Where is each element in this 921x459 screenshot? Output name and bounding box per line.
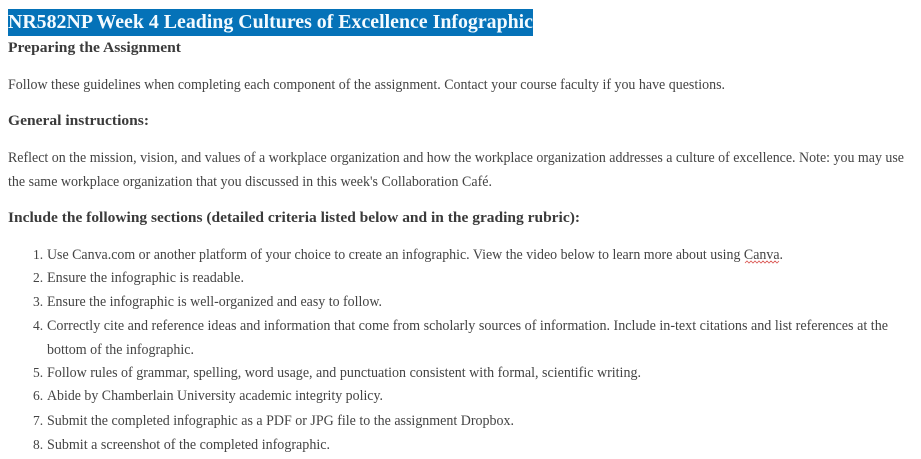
list item 8: Submit a screenshot of the completed infographic. — [47, 437, 330, 453]
list item 7: 7. — [33, 413, 43, 428]
title: NR582NP Week 4 Leading Cultures of Excellence Infographic — [8, 12, 533, 33]
list item 6: 6. — [33, 388, 43, 403]
text block: reflect: the same workplace organization that you discussed in this week's Collaboration Café. — [8, 174, 492, 190]
list item 5: Follow rules of grammar, spelling, word usage, and punctuation consistent with formal, scientific writing. — [47, 365, 641, 381]
list item 4: 4. — [33, 318, 43, 333]
list item 6: Abide by Chamberlain University academic integrity policy. — [47, 388, 383, 404]
heading: preparing the assignment: Preparing the Assignment — [8, 40, 181, 56]
list item 4: bottom of the infographic. — [47, 342, 194, 358]
heading: general instructions: General instructions: — [8, 113, 149, 129]
list item 4 — [33, 318, 888, 358]
list item 1: 1. — [33, 247, 43, 262]
text block: reflect — [8, 150, 904, 190]
list item 2: 2. — [33, 270, 43, 285]
list item 4: Correctly cite and reference ideas and information that come from scholarly sources of information. Include in-text citations and list references at the — [47, 318, 888, 334]
list item 5: 5. — [33, 365, 43, 380]
numbered list — [33, 247, 888, 453]
list item 3: Ensure the infographic is well-organized and easy to follow. — [47, 294, 382, 310]
text block: guidelines: Follow these guidelines when completing each component of the assignment. Contact your course faculty if you have questions. — [8, 77, 725, 93]
list item 3: 3. — [33, 294, 43, 309]
list item 7: Submit the completed infographic as a PDF or JPG file to the assignment Dropbox. — [47, 413, 514, 429]
list item 2: Ensure the infographic is readable. — [47, 270, 244, 286]
list item 1: Use Canva.com or another platform of your choice to create an infographic. View the video below to learn more about using Canva. — [47, 247, 783, 263]
heading: include sections: Include the following sections (detailed criteria listed below and in the grading rubric): — [8, 210, 580, 226]
list item 8: 8. — [33, 437, 43, 452]
